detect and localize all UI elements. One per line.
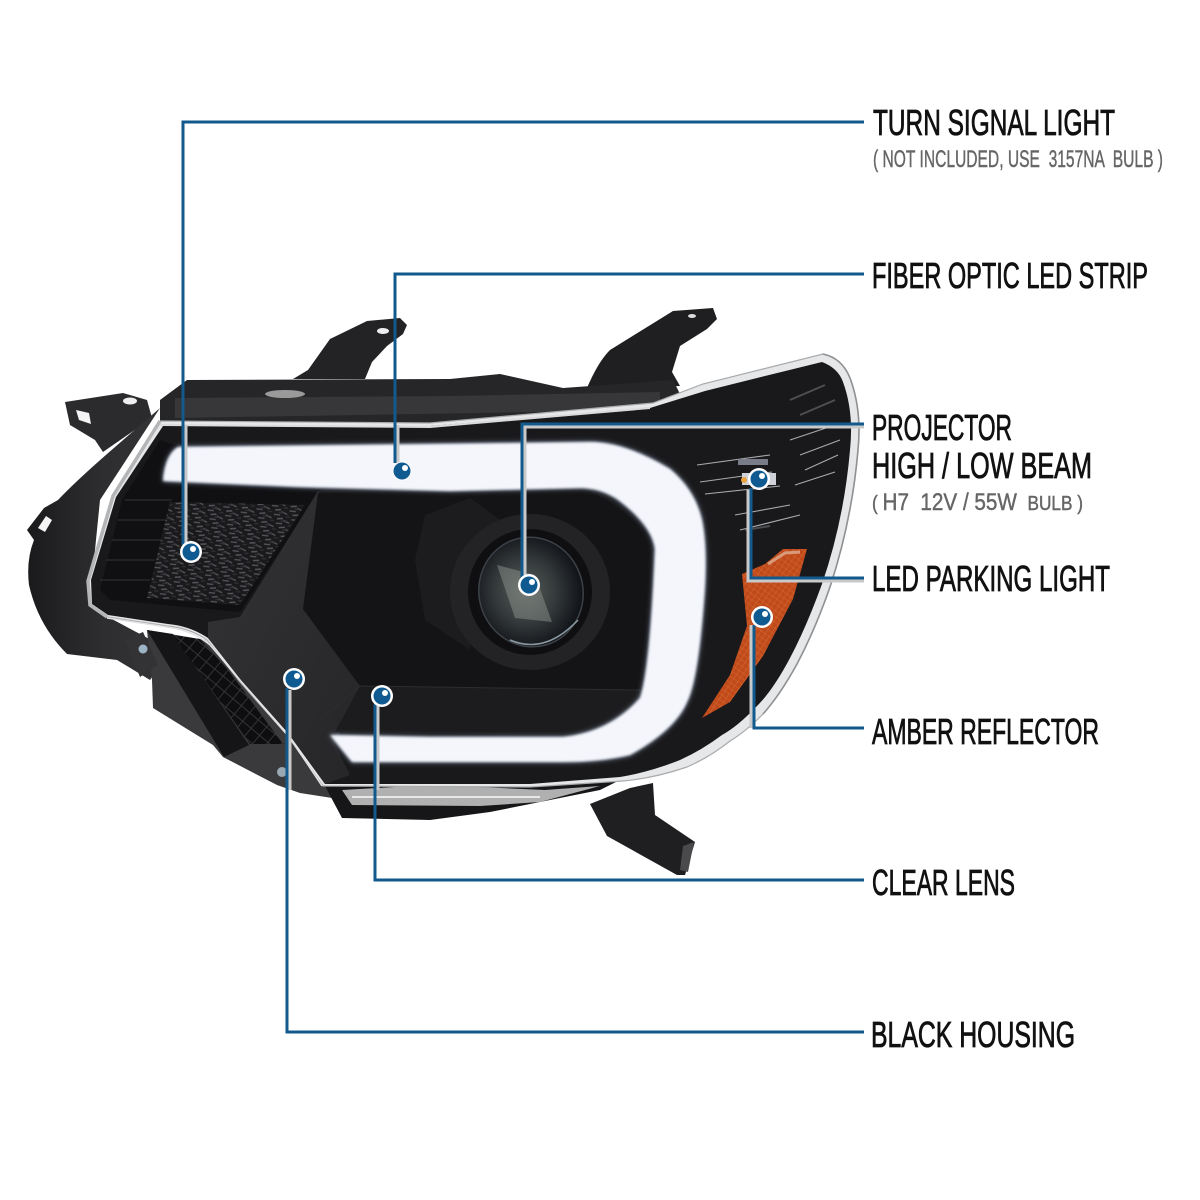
- bracket mounting hole: [123, 398, 137, 404]
- lens body: [88, 354, 859, 787]
- bay fins: [100, 500, 172, 580]
- upper right mounting tab: [587, 308, 717, 388]
- grille: [173, 635, 283, 744]
- marker dot: [748, 468, 770, 490]
- callout: black housing: [283, 668, 1075, 1055]
- bracket end detail: [680, 842, 694, 872]
- callout: clear lens: [371, 685, 1015, 903]
- leader shadow: [525, 427, 864, 578]
- inner black housing: [91, 362, 851, 784]
- projector ribbed shroud: [415, 498, 500, 650]
- top bar sheen: [265, 390, 305, 398]
- mounting screw: [138, 644, 148, 654]
- callout: turn signal light: [180, 102, 1163, 563]
- leader shadow: [288, 690, 292, 790]
- bracket square opening: [76, 410, 91, 424]
- lower plate line: [318, 686, 640, 722]
- amber reflector: [702, 549, 807, 718]
- top silver line: [160, 408, 650, 427]
- marker dot: [371, 685, 393, 707]
- marker dot: [518, 574, 540, 596]
- callout: projector: [518, 407, 1092, 596]
- lens rim highlight: [510, 620, 578, 644]
- marker dot: [283, 668, 305, 690]
- leader shadow: [750, 625, 752, 728]
- right side reflector sheen: [745, 385, 835, 530]
- top bar dark band: [175, 392, 660, 418]
- grille strip: [147, 630, 249, 757]
- upper left mounting tab: [293, 318, 407, 379]
- amber reflector highlight: [768, 552, 800, 564]
- leader line: [522, 424, 864, 578]
- callout: led parking light: [748, 468, 1110, 599]
- marker dot: [180, 541, 202, 563]
- parking light fins: [697, 425, 840, 530]
- marker dot: [751, 606, 773, 628]
- lower matte facet: [208, 491, 360, 784]
- rear housing mounting clip: [38, 516, 52, 532]
- outer lens corner shine: [763, 354, 859, 714]
- cavity lower plate: [335, 686, 645, 735]
- label line 1: PROJECTOR: [872, 407, 1012, 448]
- leader line: [375, 704, 864, 880]
- lower left block: [147, 630, 345, 800]
- leader line: [395, 274, 864, 463]
- lower strap: [125, 632, 158, 677]
- parking led amber chip: [741, 477, 747, 483]
- leader line: [183, 122, 864, 545]
- left mounting bracket: [65, 393, 152, 452]
- callout: fiber optic led strip: [392, 255, 1148, 480]
- headlight assembly illustration: [27, 308, 859, 875]
- label: BLACK HOUSING: [871, 1014, 1075, 1055]
- fiber optic glow: [163, 442, 706, 762]
- callout: amber reflector: [751, 606, 1099, 752]
- lens reflection: [497, 565, 552, 622]
- leader line: [751, 488, 864, 578]
- bottom bracket: [590, 783, 695, 875]
- label: CLEAR LENS: [872, 862, 1015, 903]
- projector lens: [467, 525, 595, 659]
- sublabel: ( H7 12V / 55W BULB ): [872, 489, 1083, 516]
- parking led: [742, 473, 776, 485]
- inner cavity: [303, 490, 655, 690]
- lower screw: [277, 767, 287, 777]
- leader line: [287, 688, 864, 1032]
- label line 2: HIGH / LOW BEAM: [872, 445, 1092, 486]
- projector outer ring: [450, 514, 610, 670]
- leader shadow: [748, 490, 864, 581]
- marker dot: [392, 462, 412, 480]
- rear housing left side: [27, 408, 170, 680]
- turn signal crystal reflector: [147, 502, 305, 605]
- lower clear strip: [325, 770, 620, 820]
- fiber optic led strip: [163, 442, 706, 762]
- leader line: [754, 625, 864, 728]
- left glossy bay: [100, 440, 320, 612]
- leader shadow: [396, 425, 400, 463]
- top housing bar: [160, 374, 720, 430]
- leader shadow: [376, 705, 380, 790]
- lower lens edge line: [107, 618, 322, 786]
- leader shadow: [184, 425, 188, 545]
- parking led top: [738, 459, 768, 465]
- silver left lens edge: [88, 421, 160, 617]
- projector mid ring: [468, 529, 592, 655]
